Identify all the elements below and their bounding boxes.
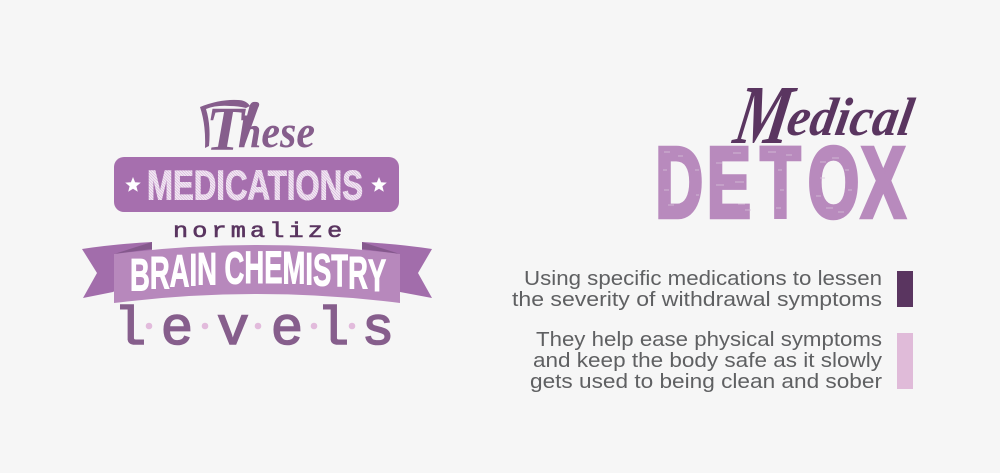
ribbon band (114, 245, 400, 303)
text block: second description with bar: They help ease physical symptoms (536, 329, 882, 351)
text: levels: l (317, 300, 349, 361)
heading: These: hese (238, 107, 315, 157)
text: levels (114, 300, 394, 361)
text block: first description with bar: the severity of withdrawal symptoms (512, 289, 882, 311)
ribbon right tail (362, 242, 432, 298)
icon: left star (125, 177, 141, 192)
bar: dark marker (897, 271, 913, 307)
panel: medical detox (512, 70, 922, 393)
ribbon left tail (82, 242, 152, 298)
heading: Medical: M (727, 70, 802, 162)
ribbon left fold (114, 242, 152, 254)
bar: light marker (897, 333, 913, 389)
text: levels: e (271, 300, 303, 361)
text block: second description with bar: gets used to being clean and sober (530, 371, 882, 393)
text: levels: s (362, 300, 394, 361)
text block: first description with bar (512, 268, 913, 311)
heading: These (200, 96, 315, 164)
ribbon text: BRAIN CHEMISTRY (130, 242, 386, 301)
heading: DETOX: DETOX (655, 126, 905, 238)
text block: first description with bar: Using specific medications to lessen (524, 268, 882, 290)
text: levels: v (217, 300, 249, 361)
banner: medications (114, 157, 399, 212)
text: levels: e (161, 300, 193, 361)
ribbon: brain chemistry (82, 242, 432, 303)
text: levels: l (114, 300, 146, 361)
text block: second description with bar (530, 329, 913, 393)
ribbon right fold (362, 242, 400, 254)
heading: Medical: edical (783, 87, 919, 147)
text block: second description with bar: and keep the body safe as it slowly (533, 350, 882, 372)
heading: These: T (206, 96, 246, 164)
text: normalize: normalize (173, 220, 342, 243)
banner text: MEDICATIONS (147, 162, 363, 208)
panel: medications statement (82, 96, 432, 361)
icon: right star (371, 177, 387, 192)
